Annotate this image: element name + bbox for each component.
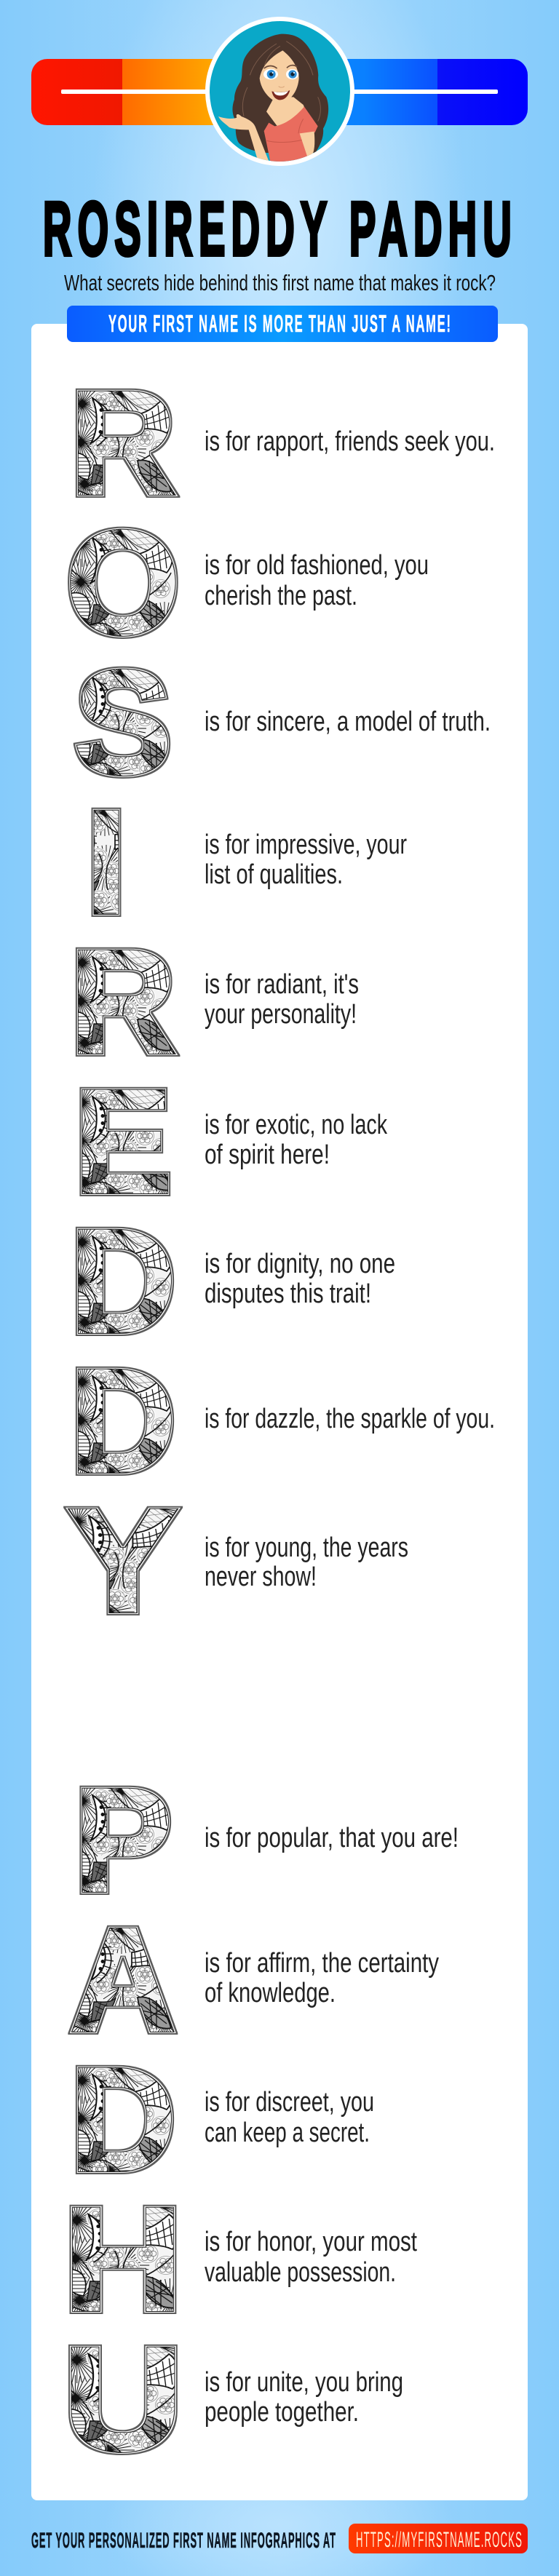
text: honor: is for honor, your most <box>205 2227 417 2257</box>
text: impressive: list of qualities. <box>205 859 343 890</box>
letter U: U <box>63 2318 183 2481</box>
letter D: D <box>70 2038 176 2201</box>
row: D for dignity <box>70 1199 395 1363</box>
text: honor: valuable possession. <box>205 2257 396 2288</box>
text: young: is for young, the years <box>205 1533 408 1563</box>
row: S for sincere <box>74 640 491 804</box>
text: exotic: is for exotic, no lack <box>205 1110 388 1140</box>
text: unite: is for unite, you bring <box>205 2367 403 2398</box>
text: honor <box>205 2227 417 2288</box>
text: radiant: your personality! <box>205 999 357 1030</box>
letter S: S <box>74 640 172 804</box>
row: D for discreet <box>70 2038 374 2201</box>
text: young: never show! <box>205 1562 317 1592</box>
text: popular: is for popular, that you are! <box>205 1823 459 1853</box>
text: radiant <box>205 969 359 1030</box>
row: R for radiant <box>70 920 359 1084</box>
letter O: O <box>66 501 180 664</box>
letter Y: Y <box>68 1479 178 1642</box>
row: P for popular <box>74 1758 459 1922</box>
row: R for rapport <box>70 361 495 525</box>
text: young <box>205 1533 408 1592</box>
row: E for exotic <box>74 1060 388 1223</box>
text: exotic <box>205 1110 388 1170</box>
text: impressive <box>205 830 407 890</box>
row: U for unite <box>63 2318 403 2481</box>
text: affirm: of knowledge. <box>205 1978 336 2008</box>
panel: white content card <box>31 324 528 2500</box>
text: old fashioned <box>205 550 429 611</box>
title: ROSIREDDY PADHU <box>43 186 512 271</box>
avatar: woman in circle <box>205 17 354 166</box>
text: affirm: is for affirm, the certainty <box>205 1948 439 1979</box>
letter P: P <box>74 1758 172 1922</box>
text: exotic: of spirit here! <box>205 1140 330 1170</box>
letter E: E <box>74 1060 172 1223</box>
text: old fashioned: is for old fashioned, you <box>205 550 429 581</box>
text: unite: people together. <box>205 2397 359 2428</box>
letter D: D <box>70 1199 176 1363</box>
text: discreet: can keep a secret. <box>205 2118 370 2148</box>
letter A: A <box>70 1898 176 2062</box>
letter R: R <box>70 920 176 1084</box>
text: old fashioned: cherish the past. <box>205 581 357 611</box>
letter D: D <box>70 1339 176 1503</box>
footer call to action: GET YOUR PERSONALIZED FIRST NAME INFOGRAPHICS AT <box>31 2528 336 2552</box>
row: A for affirm <box>70 1898 439 2062</box>
text: radiant: is for radiant, it's <box>205 969 359 1000</box>
text: impressive: is for impressive, your <box>205 830 407 860</box>
text: affirm <box>205 1948 439 2008</box>
row: I for impressive <box>86 780 407 944</box>
text: dignity <box>205 1249 395 1309</box>
header banner bar <box>31 59 528 125</box>
letter H: H <box>63 2178 183 2341</box>
tagline banner <box>67 306 498 342</box>
row: D for dazzle <box>70 1339 495 1503</box>
text: dignity: disputes this trait! <box>205 1279 371 1309</box>
letter R: R <box>70 361 176 525</box>
text: discreet: is for discreet, you <box>205 2087 374 2118</box>
row: O for old fashioned <box>66 501 429 664</box>
text: dignity: is for dignity, no one <box>205 1249 395 1279</box>
text: unite <box>205 2367 403 2428</box>
tagline banner: YOUR FIRST NAME IS MORE THAN JUST A NAME! <box>108 310 451 338</box>
row: H for honor <box>63 2178 417 2341</box>
letter I: I <box>86 780 127 944</box>
text: discreet <box>205 2087 374 2148</box>
row: Y for young <box>68 1479 408 1642</box>
footer link button: HTTPS://MYFIRSTNAME.ROCKS <box>356 2527 522 2551</box>
